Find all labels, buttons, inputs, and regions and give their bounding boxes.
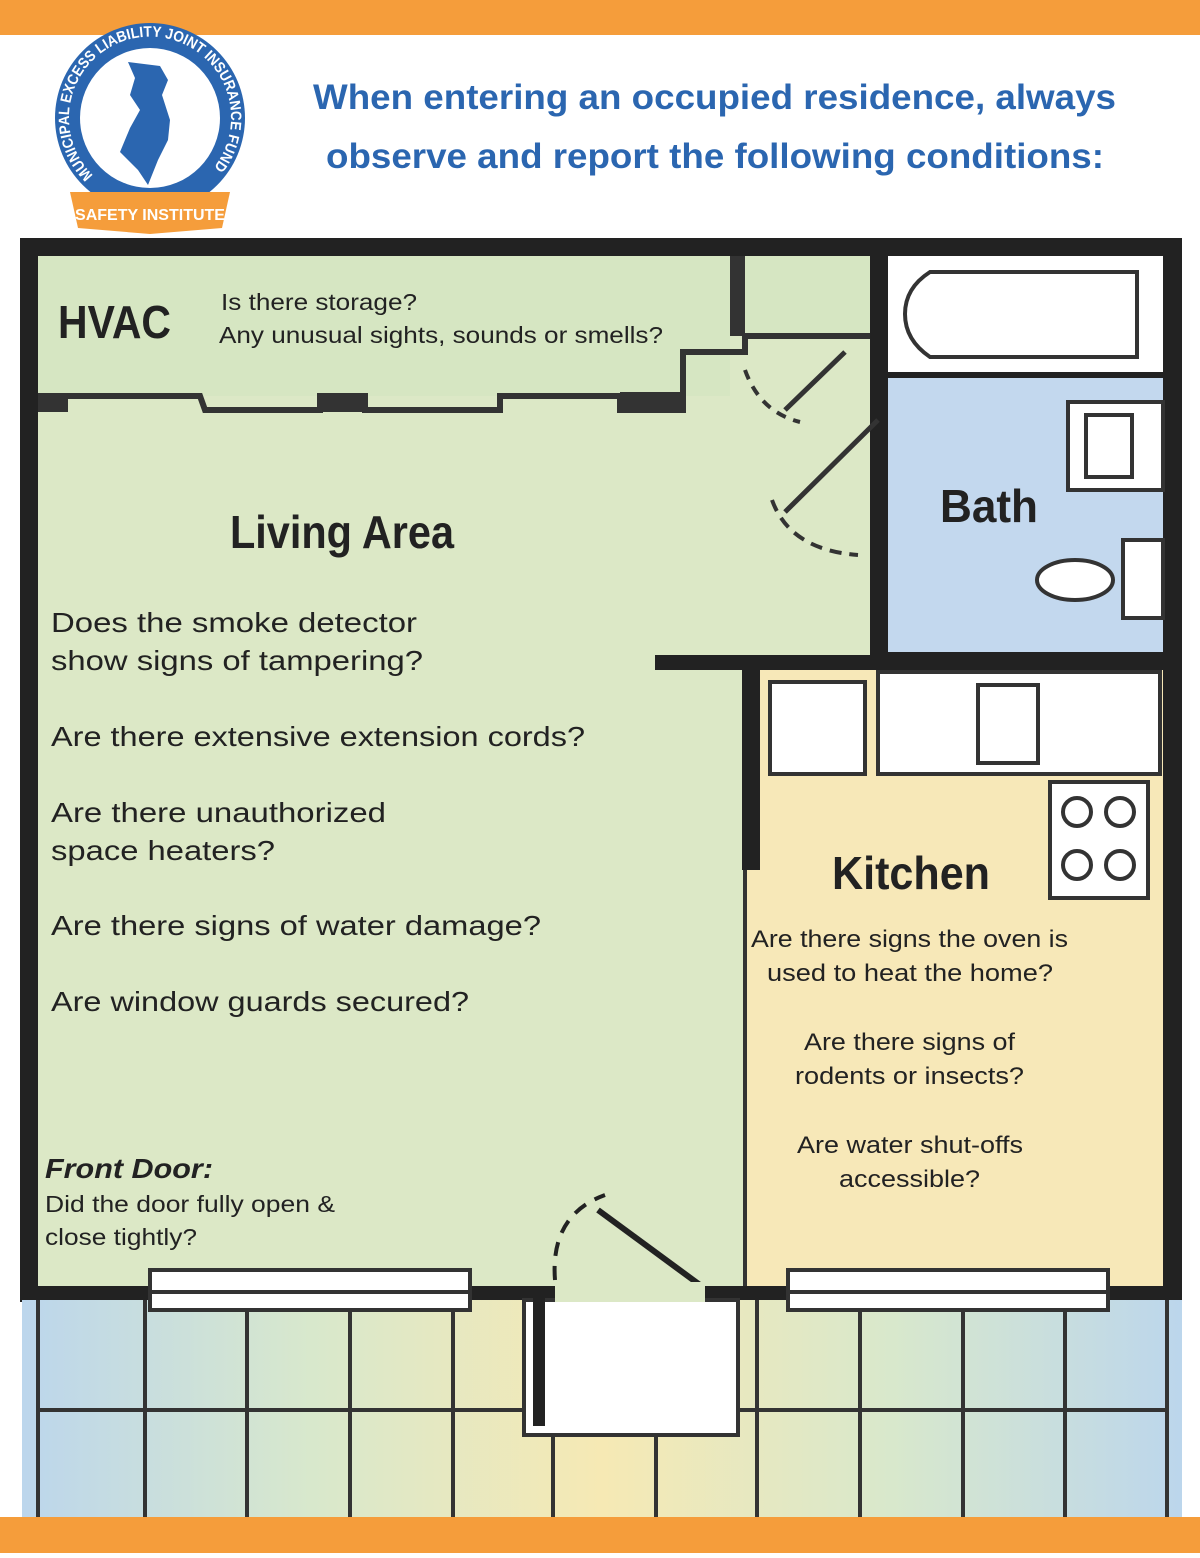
kitchen: Kitchen (832, 847, 990, 899)
tiles (22, 1270, 1182, 1517)
living area text: show signs of tampering? (51, 645, 423, 676)
living area text: space heaters? (51, 835, 275, 866)
kitchen: accessible? (839, 1166, 980, 1193)
top bar (0, 0, 1200, 35)
kitchen (751, 847, 1068, 1193)
living area text: Are window guards secured? (51, 986, 469, 1017)
living area text: Did the door fully open & (45, 1191, 335, 1217)
living area text: Does the smoke detector (51, 607, 417, 638)
bath label: Bath (940, 480, 1038, 532)
title: observe and report the following conditions: (326, 137, 1104, 176)
title (313, 78, 1116, 176)
kitchen: Are water shut-offs (797, 1132, 1023, 1159)
living area text: close tightly? (45, 1224, 197, 1250)
living area text: Front Door: (45, 1153, 213, 1184)
HVAC (58, 289, 663, 348)
bottom bar (0, 1517, 1200, 1553)
kitchen: rodents or insects? (795, 1063, 1024, 1090)
title: When entering an occupied residence, always (313, 78, 1116, 117)
HVAC: HVAC (58, 296, 171, 348)
logo: SAFETY INSTITUTE (75, 207, 225, 224)
living area text (45, 506, 585, 1250)
kitchen: Are there signs of (804, 1029, 1015, 1056)
living area text: Are there extensive extension cords? (51, 721, 585, 752)
logo: MUNICIPAL EXCESS LIABILITY JOINT INSURANCE FUND (58, 26, 242, 182)
floor plan (20, 238, 1182, 1302)
kitchen: Are there signs the oven is (751, 926, 1068, 953)
HVAC: Any unusual sights, sounds or smells? (219, 322, 663, 348)
kitchen: used to heat the home? (767, 960, 1053, 987)
living area text: Living Area (230, 506, 454, 558)
living area text: Are there unauthorized (51, 797, 386, 828)
living area text: Are there signs of water damage? (51, 910, 541, 941)
HVAC: Is there storage? (221, 289, 417, 315)
